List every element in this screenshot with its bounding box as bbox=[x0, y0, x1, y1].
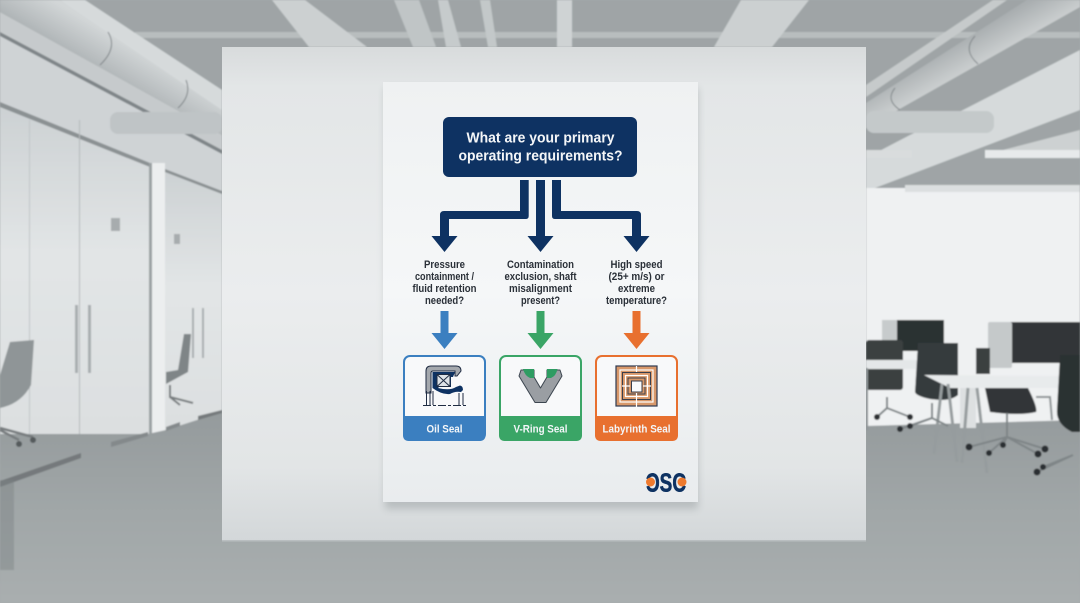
floor bbox=[0, 412, 222, 603]
question: contamination exclusion: Contamination bbox=[507, 259, 574, 271]
arrow: to contamination exclusion bbox=[528, 180, 554, 252]
icon: oil seal bbox=[423, 366, 466, 406]
card: labyrinth seal bbox=[595, 356, 678, 441]
question: pressure containment: Pressure bbox=[424, 259, 465, 271]
card: oil seal: Oil Seal bbox=[426, 424, 462, 436]
question: high speed: (25+ m/s) or bbox=[608, 271, 665, 283]
header box: What are your primary bbox=[466, 130, 615, 146]
right ceiling, ducts and white wall bbox=[866, 0, 1080, 428]
question: high speed: extreme bbox=[618, 283, 655, 295]
question: high speed: temperature? bbox=[606, 295, 667, 307]
question: contamination exclusion bbox=[504, 259, 577, 307]
logo: DSC: ƆSC bbox=[646, 468, 686, 498]
question: pressure containment: containment / bbox=[415, 271, 474, 283]
poster bbox=[383, 82, 698, 502]
question: high speed: High speed bbox=[610, 259, 662, 271]
question: contamination exclusion: exclusion, shaft bbox=[504, 271, 577, 283]
reflected chairs bbox=[0, 340, 34, 408]
card: oil seal bbox=[403, 356, 486, 441]
arrow: orange bbox=[624, 311, 650, 349]
arrow: to high speed bbox=[552, 180, 650, 252]
office desks, chairs and monitors bbox=[866, 320, 1080, 476]
icon: v-ring bbox=[519, 369, 562, 402]
card: labyrinth seal: Labyrinth Seal bbox=[602, 424, 670, 436]
question: pressure containment: fluid retention bbox=[412, 283, 477, 295]
card: v-ring seal bbox=[499, 356, 582, 441]
wall panel bbox=[222, 47, 866, 542]
header box: operating requirements? bbox=[458, 148, 622, 164]
floor: right side bbox=[866, 420, 1080, 603]
question: contamination exclusion: misalignment bbox=[509, 283, 572, 295]
question: pressure containment: needed? bbox=[425, 295, 464, 307]
header box bbox=[443, 117, 637, 177]
poster shadow bbox=[385, 88, 698, 509]
arrow: to pressure containment bbox=[432, 180, 529, 252]
arrow: blue bbox=[432, 311, 458, 349]
question: high speed bbox=[606, 259, 667, 307]
icon: labyrinth bbox=[616, 366, 657, 407]
arrow: green bbox=[528, 311, 554, 349]
ceiling beams and top pipes bbox=[135, 0, 1080, 47]
question: pressure containment bbox=[412, 259, 477, 307]
question: contamination exclusion: present? bbox=[521, 295, 560, 307]
card: v-ring seal: V-Ring Seal bbox=[514, 424, 568, 436]
glass door handles bbox=[75, 305, 78, 373]
